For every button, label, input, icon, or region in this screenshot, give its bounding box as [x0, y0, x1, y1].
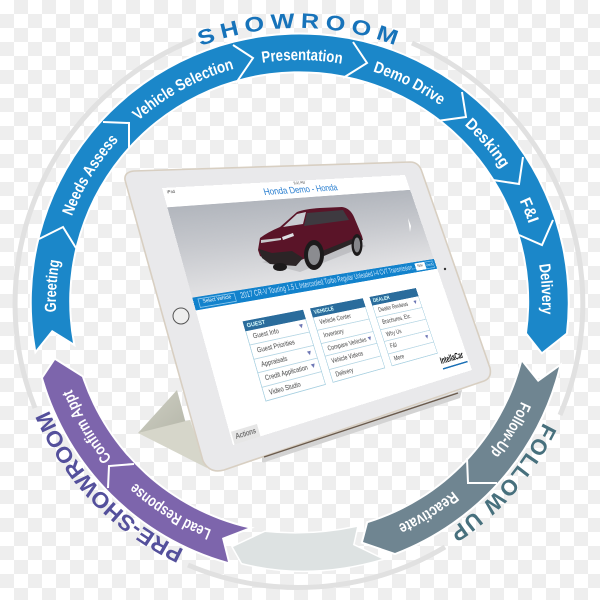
used button [424, 261, 435, 269]
headlight [282, 233, 294, 240]
tablet screen [162, 175, 472, 445]
outer grey ring: bottom arc [188, 547, 445, 588]
dealer menu [369, 288, 438, 366]
guest menu: Video Studio [268, 380, 302, 396]
new button [414, 262, 426, 271]
step labels: Desking [465, 118, 508, 169]
step labels: Follow-Up [491, 402, 531, 456]
camera [444, 268, 446, 270]
chevron dividers [39, 42, 553, 248]
follow up grey band [363, 362, 559, 553]
new button: New [417, 264, 424, 268]
dealer menu: Why Us [385, 328, 402, 338]
sill trim [322, 239, 354, 256]
vehicle menu: Compare Vehicles [327, 336, 367, 352]
dealer menu: F&I [389, 341, 398, 350]
outer grey ring: right arc [412, 43, 583, 415]
step labels: Reactivate [399, 492, 460, 532]
front bumper [259, 249, 303, 266]
screen title: Honda Demo - Honda [262, 182, 339, 197]
guest menu [243, 310, 326, 402]
rear wheel [352, 234, 362, 256]
step labels: Lead Response [131, 484, 211, 540]
heading: follow up: FOLLOW UP [454, 424, 556, 540]
dealer menu: DEALER [372, 294, 391, 304]
dealer menu: Brochures, Etc. [381, 313, 412, 326]
step labels: Needs Assess [62, 136, 118, 216]
heading: pre-showroom: PRE-SHOWROOM [36, 411, 183, 563]
step labels: Vehicle Selection [131, 61, 234, 118]
grille [261, 238, 281, 243]
clock: 9:41 PM [293, 181, 306, 186]
vehicle selection bar [192, 259, 437, 310]
step labels: Delivery [538, 264, 554, 314]
guest menu: Credit Application [264, 364, 309, 382]
vehicle description: 2017 CR-V Touring 1.5 L Intercooled Turbo Regular Unleaded I-4 CVT Transmission... [239, 263, 417, 301]
vehicle menu: Inventory [323, 328, 345, 339]
home button [173, 308, 189, 324]
guest menu: Guest Priorities [256, 339, 296, 355]
step labels [44, 50, 554, 540]
guest menu: Guest Info [252, 327, 280, 340]
windshield [283, 212, 306, 227]
step labels: Presentation [262, 50, 342, 64]
chevron divider [108, 464, 134, 488]
actions tab [231, 424, 260, 445]
side edge line [264, 393, 458, 457]
vehicle menu: VEHICLE [313, 305, 335, 316]
IntellaCar logo: IntellaCar [439, 349, 465, 366]
light grey blank segment [233, 527, 382, 571]
used button: Used [426, 263, 433, 268]
vehicle menu: Vehicle Center [319, 313, 352, 326]
guest menu: GUEST [246, 318, 266, 329]
guest menu: Appraisals [260, 355, 288, 368]
tablet stand [138, 390, 207, 468]
dealer menu: More [393, 353, 405, 362]
outer grey ring: left arc [15, 40, 193, 408]
showroom photo backdrop [167, 190, 434, 298]
vehicle menu [310, 298, 385, 383]
step labels: F&I [520, 197, 539, 223]
step labels: Confirm Appt [62, 390, 110, 463]
front wheel near [273, 263, 287, 271]
select vehicle button: Select Vehicle [202, 295, 232, 305]
chevron divider [467, 458, 497, 483]
step labels: Greeting [44, 260, 62, 312]
vehicle menu: Delivery [335, 366, 354, 378]
shadow [262, 240, 366, 272]
backdrop highlight [408, 218, 411, 232]
front side wheel [304, 240, 324, 270]
showroom blue band [32, 34, 568, 352]
actions tab: Actions [235, 427, 257, 441]
status text: iPad [167, 190, 176, 195]
step labels: Demo Drive [374, 61, 444, 104]
car body [258, 207, 363, 262]
side windows [304, 210, 349, 226]
vehicle menu: Vehicle Videos [331, 350, 364, 365]
heading: showroom: SHOWROOM [198, 13, 398, 45]
dealer menu: Dealer Reviews [377, 301, 409, 313]
pre-showroom purple band [43, 360, 248, 562]
select vehicle button [197, 293, 237, 308]
tablet body [125, 162, 490, 471]
